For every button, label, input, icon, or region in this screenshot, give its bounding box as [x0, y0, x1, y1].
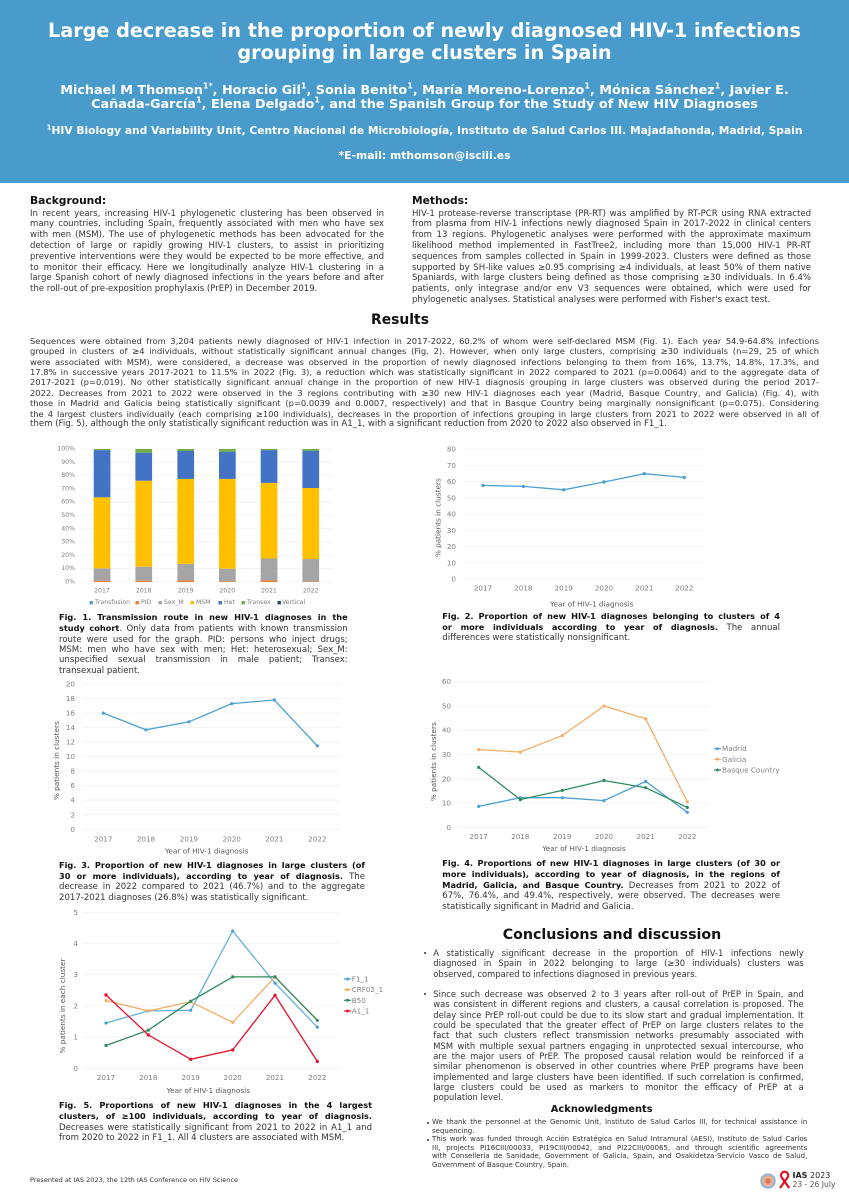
y axis labels: 20 — [447, 542, 456, 551]
icon: Brisbane rosette — [760, 1173, 776, 1189]
y axis labels: 10 — [447, 558, 456, 567]
y axis labels: 50 — [442, 702, 451, 710]
y axis labels: 1 — [73, 1033, 78, 1042]
x axis title: Year of HIV-1 diagnosis — [541, 844, 626, 853]
caption: figure 2 — [442, 611, 780, 643]
text: background: preventive interventions were they would be expected to be more effective, and — [30, 252, 384, 262]
text: results: grouped in clusters of ≥4 individuals, without statistically significant annual changes (Fig. 2). However, when only large clusters, comprising ≥30 individuals (n=29, 25 of which — [30, 346, 819, 356]
x axis labels — [94, 588, 319, 594]
bar 2018 — [135, 449, 152, 582]
x axis labels: 2020 — [595, 832, 614, 841]
text: background: many countries, including Spain, frequently associated with men who have sex — [30, 219, 384, 229]
y axis labels: 20 — [66, 680, 75, 688]
y axis labels: 80% — [61, 472, 75, 479]
caption: figure 3: decrease in 2022 compared to 2021 (46.7%) and to the aggregate — [59, 882, 365, 892]
caption: figure 4: more individuals), according to year of diagnosis, in the regions of — [442, 869, 780, 879]
x axis labels: 2021 — [266, 1073, 284, 1082]
caption: figure 5: Decreases were statistically significant from 2021 to 2022 in A1_1 and — [59, 1123, 372, 1133]
caption: figure 4: 67%, 76.4%, and 49.4%, respectively, were observed. The decreases were — [442, 891, 780, 901]
acknowledgment text lines: with Consellería de Sanidade, Government of Galicia, Spain, and Osakidetza-Servicio Vasco de Salud, — [432, 1152, 807, 1160]
y axis labels: 40% — [61, 525, 75, 532]
x axis title: Year of HIV-1 diagnosis — [164, 846, 249, 856]
authors — [60, 82, 789, 112]
heading: results: Results — [371, 312, 429, 328]
legend — [344, 974, 383, 1016]
caption: figure 4: Madrid, Galicia, and Basque Country. Decreases from 2021 to 2022 of — [442, 880, 780, 891]
acknowledgment text lines: Government of Basque Country, Spain. — [432, 1161, 569, 1169]
text: background: with men (MSM). The use of phylogenetic methods has been advocated for the — [30, 230, 384, 240]
y axis labels: 4 — [70, 796, 75, 805]
y axis title: % patients in clusters — [52, 721, 61, 800]
legend: A1_1 — [352, 1006, 369, 1016]
footer note: Presented at IAS 2023, the 12th IAS Conference on HIV Science — [30, 1176, 238, 1184]
caption: figure 1: route were used for the graph. PID: persons who inject drugs; — [59, 635, 348, 645]
x axis labels: 2020 — [595, 584, 614, 592]
conference dates: 23 - 26 July — [792, 1180, 836, 1189]
bullet marks — [424, 952, 426, 995]
y axis labels: 12 — [66, 738, 75, 747]
bar 2020 — [219, 449, 236, 582]
text: methods — [412, 209, 811, 305]
text: results: were associated with MSM), were considered, a decrease was observed in the proportion of newly diagnosed infections belonging to them from 16%, 13.7%, 14.8%, 17.3%, and — [30, 357, 819, 367]
x axis labels: 2019 — [553, 832, 572, 841]
header banner — [0, 0, 849, 183]
conclusion bullet 2: delay since PrEP roll-out could be due to its slow start and gradual implementation. It — [433, 1010, 804, 1020]
y axis labels: 30 — [447, 526, 456, 535]
x axis labels — [94, 834, 326, 844]
text: acknowledgments — [427, 1118, 807, 1169]
bar 2017 — [94, 449, 110, 582]
text: background: the roll-out of pre-exposition prophylaxis (PrEP) in December 2019. — [30, 284, 317, 294]
text: methods: HIV-1 protease-reverse transcriptase (PR-RT) was amplified by RT-PCR using RNA extracted — [412, 209, 811, 219]
line: A1_1 — [104, 993, 319, 1063]
y axis labels: 10 — [66, 752, 75, 761]
caption: figure 4: Fig. 4. Proportions of new HIV-1 diagnoses in large clusters (of 30 or — [442, 858, 780, 868]
text: background: large Spanish cohort of newly diagnosed infections in the years before and after — [30, 273, 384, 283]
authors: Michael M Thomson1*, Horacio Gil1, Sonia Benito1, María Moreno-Lorenzo1, Mónica Sánchez1, Javier E. — [60, 82, 789, 98]
caption: figure 1: study cohort. Only data from patients with known transmission — [59, 623, 348, 634]
caption: figure 5: clusters, of ≥100 individuals, according to year of diagnosis. — [59, 1111, 372, 1121]
IAS label: IAS 2023 — [792, 1171, 830, 1180]
y axis labels: 50% — [61, 512, 75, 519]
x axis labels: 2018 — [511, 832, 530, 841]
conclusion bullet 1 — [433, 948, 804, 979]
y axis labels: 40 — [447, 510, 456, 518]
x axis labels: 2017 — [94, 588, 110, 594]
acknowledgment text lines: This work was funded through Acción Estratégica en Salud Intramural (AESI), Instituto de Salud Carlos — [432, 1135, 807, 1143]
line: large clusters — [102, 698, 319, 747]
bar 2022 — [302, 449, 319, 582]
conclusion bullet 1: A statistically significant decrease in the proportion of HIV-1 infections newly — [433, 948, 804, 958]
IAS 2023 logo — [760, 1170, 836, 1189]
y axis labels: 20 — [442, 774, 451, 783]
caption: figure 2: or more individuals according to year of diagnosis. The annual — [442, 622, 780, 633]
legend — [714, 744, 780, 774]
affiliation: 1HIV Biology and Variability Unit, Centro Nacional de Microbiología, Instituto de Salud Carlos III. Majadahonda, Madrid, Spain — [47, 123, 802, 137]
icon: red ribbon — [780, 1172, 789, 1188]
text: methods: likelihood method implemented in FastTree2, including more than 15,000 HIV-1 PR-RT — [412, 241, 811, 251]
conclusion bullet 2: could be speculated that the greater effect of PrEP on large clusters relates to the — [433, 1020, 804, 1030]
conclusion bullet 2: similar phenomenon is observed in other countries where PrEP programs have been — [433, 1061, 804, 1071]
x axis title: Year of HIV-1 diagnosis — [549, 600, 634, 608]
caption: figure 5 — [59, 1100, 372, 1143]
text: methods: from 13 regions. Phylogenetic analyses were performed with the approximate maximum — [412, 230, 811, 240]
x axis labels: 2021 — [637, 832, 655, 841]
caption: figure 1: unspecified sexual transmission in male patient; Transex: — [59, 655, 348, 665]
x axis labels: 2017 — [474, 584, 492, 592]
x axis labels: 2022 — [678, 832, 696, 841]
text: methods: supported by SH-like values ≥0.95 comprising ≥4 individuals, at least 50% of them native — [412, 263, 811, 273]
x axis labels: 2017 — [94, 834, 112, 844]
y axis labels: 0% — [65, 578, 75, 586]
chart: figure 4 regional line chart — [429, 677, 780, 853]
conclusion bullet 1: observed, compared to infections diagnosed in previous years. — [433, 969, 697, 979]
line: B50 — [104, 975, 319, 1047]
legend: PID — [141, 599, 152, 606]
acknowledgment text lines: We thank the personnel at the Genomic Unit, Instituto de Salud Carlos III, for technical assistance in — [432, 1118, 807, 1126]
chart: figure 5 cluster line chart — [58, 908, 383, 1095]
legend: CRF02_1 — [352, 985, 383, 994]
text: results: 2017-2021 (p=0.019). No other statistically significant annual change in the proportion of new HIV-1 diagnosis grouping in large clusters was observed during the period 2017- — [30, 377, 819, 387]
caption: figure 1: transexual patient. — [59, 666, 140, 676]
caption: figure 2: differences were statistically nonsignificant. — [442, 633, 630, 643]
legend: Madrid — [722, 744, 747, 753]
x axis labels: 2022 — [308, 834, 326, 844]
line: Galicia — [477, 704, 689, 803]
x axis labels — [470, 832, 696, 841]
text: background — [30, 209, 384, 294]
y axis labels: 2 — [73, 1001, 78, 1010]
y axis labels: 70% — [61, 485, 75, 492]
caption: figure 1 — [59, 612, 348, 676]
caption: figure 4: statistically significant in Madrid and Galicia. — [442, 902, 634, 912]
y axis labels: 18 — [66, 694, 75, 703]
title — [48, 19, 801, 64]
heading: methods: Methods: — [412, 194, 468, 207]
text: results: Sequences were obtained from 3,204 patients newly diagnosed of HIV-1 infection in 2017-2022, 60.2% of whom were self-declared MSM (Fig. 1). Each year 54.9-64.8% infections — [30, 336, 819, 346]
y axis labels: 2 — [70, 810, 75, 819]
text: results: those in Madrid and Galicia being statistically significant (p=0.0039 and 0.0007, respectively) and that in Basque Country being marginally nonsignificant (p=0.075). Considering — [30, 398, 819, 408]
y axis labels: 60% — [61, 499, 75, 506]
x axis labels: 2020 — [219, 588, 235, 594]
line: Madrid — [477, 780, 689, 814]
x axis labels — [474, 584, 693, 592]
legend — [90, 599, 305, 606]
y axis labels: 10% — [61, 565, 75, 572]
y axis labels: 8 — [70, 767, 75, 776]
x axis labels: 2021 — [261, 588, 277, 594]
x axis labels: 2021 — [635, 584, 653, 592]
acknowledgment text lines: sequencing. — [432, 1127, 474, 1135]
conclusion bullet 2: fact that such clusters reflect transmission networks presumably associated with — [433, 1030, 804, 1040]
caption: figure 4 — [442, 858, 780, 912]
text: methods: phylogenetic analyses. Statistical analyses were performed with Fisher's exact test. — [412, 295, 770, 305]
acknowledgment text lines — [432, 1118, 807, 1169]
x axis labels: 2017 — [97, 1073, 115, 1082]
x axis labels: 2017 — [470, 832, 488, 841]
bar 2019 — [177, 449, 194, 582]
x axis labels: 2019 — [180, 834, 199, 844]
caption: figure 5: from 2020 to 2022 in F1_1. All 4 clusters are associated with MSM. — [59, 1133, 344, 1143]
x axis labels: 2019 — [178, 588, 194, 594]
title: grouping in large clusters in Spain — [237, 41, 612, 64]
y axis labels — [66, 680, 75, 834]
conclusion bullet 2: large clusters could be used as markers to monitor the efficacy of PrEP at a — [433, 1082, 804, 1092]
x axis labels: 2021 — [265, 834, 283, 844]
chart: figure 1 stacked bars — [57, 446, 331, 606]
legend: Galicia — [722, 755, 746, 764]
y axis labels: 50 — [447, 493, 456, 502]
legend: Basque Country — [722, 766, 780, 774]
x axis labels: 2022 — [303, 588, 319, 594]
x axis labels: 2018 — [136, 588, 152, 594]
y axis labels: 40 — [442, 726, 451, 735]
x axis title: Year of HIV-1 diagnosis — [166, 1086, 250, 1095]
y axis labels: 4 — [73, 939, 78, 948]
y axis labels: 6 — [70, 781, 75, 790]
legend: Sex_M — [164, 599, 184, 606]
line: CRF02_1 — [104, 975, 317, 1024]
x axis labels: 2018 — [137, 834, 156, 844]
caption: figure 3: Fig. 3. Proportion of new HIV-1 diagnoses in large clusters (of — [59, 860, 365, 870]
x axis labels: 2019 — [182, 1073, 200, 1082]
heading: acknowledgments: Acknowledgments — [551, 1104, 653, 1114]
y axis labels: 100% — [57, 446, 75, 452]
legend: Transfusion — [94, 599, 130, 606]
conclusion bullet 1: diagnosed in Spain in 2022 belonging to large (≥30 individuals) clusters was — [433, 958, 804, 968]
y axis title: % patients in clusters — [429, 722, 438, 801]
caption: figure 3: 30 or more individuals), according to year of diagnosis. The — [59, 871, 365, 882]
heading: background: Background: — [30, 194, 106, 207]
y axis title: % patients in each cluster — [58, 958, 67, 1054]
caption: figure 3: 2017-2021 diagnoses (26.8%) was statistically significant. — [59, 893, 308, 903]
conclusion bullet 2: population level. — [433, 1092, 503, 1102]
title: Large decrease in the proportion of newly diagnosed HIV-1 infections — [48, 19, 801, 42]
x axis labels: 2019 — [555, 584, 573, 592]
chart: figure 3 line chart — [52, 680, 338, 856]
conclusion bullet 2 — [433, 989, 804, 1102]
line: F1_1 — [104, 929, 319, 1029]
caption: figure 5: Fig. 5. Proportions of new HIV-1 diagnoses in the 4 largest — [59, 1100, 372, 1110]
y axis labels: 0 — [70, 825, 75, 834]
y axis labels: 20% — [61, 552, 75, 559]
chart: figure 2 line chart — [434, 444, 705, 608]
y axis title: % patients in clusters — [434, 478, 442, 557]
legend: B50 — [352, 996, 366, 1005]
legend: Vertical — [282, 599, 305, 606]
text: results: the 4 largest clusters individually (each comprising ≥100 individuals), decreases in the proportion of infections grouping in large clusters from 2021 to 2022 were observed in all of — [30, 409, 819, 419]
y axis labels: 0 — [451, 574, 456, 584]
y axis labels — [442, 677, 451, 832]
y axis labels: 14 — [66, 723, 75, 732]
caption: figure 1: Fig. 1. Transmission route in new HIV-1 diagnoses in the — [59, 612, 348, 622]
text: results — [30, 336, 820, 429]
text: background: detection of large or rapidly growing HIV-1 clusters, to assist in prioritizing — [30, 241, 384, 251]
email: *E-mail: mthomson@isciii.es — [338, 149, 511, 162]
legend: F1_1 — [352, 974, 369, 984]
caption: figure 2: Fig. 2. Proportion of new HIV-1 diagnoses belonging to clusters of 4 — [442, 611, 780, 621]
y axis labels: 90% — [61, 459, 75, 466]
text: methods: Spaniards, with large clusters being defined as those comprising ≥30 individuals. In 6.4% — [412, 273, 811, 283]
x axis labels: 2020 — [223, 834, 241, 844]
y axis labels — [447, 444, 456, 584]
heading: conclusions and discussion: Conclusions and discussion — [503, 927, 721, 943]
legend: Het — [224, 599, 235, 606]
y axis labels: 30% — [61, 539, 75, 546]
bar 2021 — [261, 449, 277, 582]
bullet list: conclusions — [424, 948, 804, 1102]
y axis labels: 70 — [447, 461, 456, 470]
conclusion bullet 2: was consistent in different regions and clusters, a causal correlation is proposed. The — [433, 999, 804, 1009]
x axis labels: 2018 — [139, 1073, 158, 1082]
y axis labels: 80 — [447, 444, 456, 454]
y axis labels — [73, 908, 78, 1073]
text: methods: patients, only integrase and/or env V3 sequences were obtained, which were used for — [412, 284, 811, 294]
y axis labels — [57, 446, 75, 586]
legend: Transex — [246, 599, 271, 606]
x axis labels: 2020 — [224, 1073, 242, 1082]
y axis labels: 30 — [442, 750, 451, 759]
text: results: them (Fig. 5), although the only statistically significant reduction was in A1_1, with a significant reduction from 2020 to 2022 also observed in F1_1. — [30, 419, 667, 429]
y axis labels: 3 — [73, 970, 78, 979]
conclusion bullet 2: MSM with multiple sexual partners engaging in unprotected sexual intercourse, who — [433, 1041, 804, 1051]
y axis labels: 0 — [73, 1064, 78, 1073]
text: background: to monitor their efficacy. Here we longitudinally analyze HIV-1 clustering in a — [30, 263, 384, 273]
caption: figure 3 — [59, 860, 365, 903]
acknowledgment text lines: III, projects PI16CIII/00033, PI19CIII/00042, and PI22CIII/00065, and through scientific agreements — [432, 1144, 807, 1152]
line: clusters of 4 or more — [481, 472, 686, 491]
y axis labels: 60 — [447, 477, 456, 486]
x axis labels: 2018 — [514, 584, 533, 592]
x axis labels: 2022 — [675, 584, 693, 592]
y axis labels: 10 — [442, 798, 451, 808]
text: results: 2022. Decreases from 2021 to 2022 were observed in the 3 regions contributing with ≥30 new HIV-1 diagnoses each year (Madrid, Basque Country, and Galicia) (Fig. 4), with — [30, 388, 819, 398]
y axis labels: 60 — [442, 677, 451, 686]
legend: MSM — [196, 599, 211, 606]
text: methods: from plasma from HIV-1 infections newly diagnosed Spain in 2017-2022 in clinical centers — [412, 219, 811, 229]
y axis labels: 16 — [66, 709, 75, 718]
acknowledgment bullet marks — [427, 1122, 429, 1141]
x axis labels: 2022 — [308, 1073, 326, 1082]
conclusion bullet 2: implemented and large clusters have been identified. If such correlation is confirmed, — [433, 1072, 804, 1082]
y axis labels: 5 — [73, 908, 78, 917]
conclusion bullet 2: are the major users of PrEP. The proposed causal relation would be reinforced if a — [433, 1051, 804, 1061]
y axis labels: 0 — [446, 823, 451, 832]
text: results: 17.8% in successive years 2017-2021 to 11.5% in 2022 (Fig. 3), a reduction which was statistically significant in 2022 compared to 2021 (p=0.0064) and to the aggregate data of — [30, 367, 819, 377]
caption: figure 1: MSM: men who have sex with men; Het: heterosexual; Sex_M: — [59, 645, 348, 655]
x axis labels — [97, 1073, 326, 1082]
text: methods: sequences from samples collected in Spain in 1999-2023. Clusters were defined as those — [412, 252, 811, 262]
conclusion bullet 2: Since such decrease was observed 2 to 3 years after roll-out of PrEP in Spain, and — [433, 989, 804, 999]
authors: Cañada-García1, Elena Delgado1, and the Spanish Group for the Study of New HIV Diagnoses — [91, 95, 758, 112]
line: Basque Country — [477, 766, 689, 809]
text: background: In recent years, increasing HIV-1 phylogenetic clustering has been observed in — [30, 209, 384, 219]
